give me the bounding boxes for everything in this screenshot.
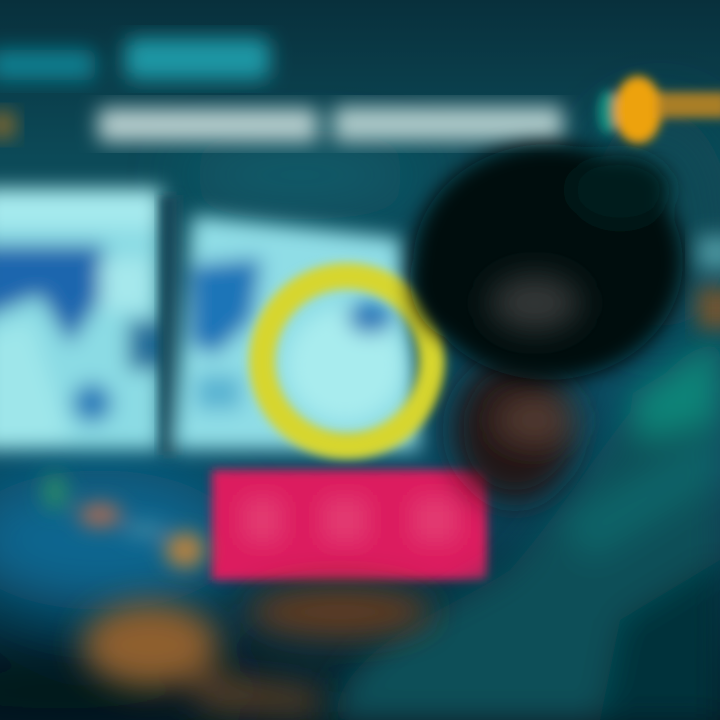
right edge details — [697, 235, 720, 329]
left orange mark — [0, 111, 16, 139]
panel: right monitor — [172, 215, 420, 450]
ring content — [287, 302, 403, 421]
highlight ring — [262, 276, 432, 446]
small chart streak — [43, 474, 205, 568]
heading: white subtitle — [98, 106, 563, 142]
person: shoulder — [330, 335, 720, 720]
hands — [82, 586, 432, 715]
person: cap — [410, 144, 683, 380]
monitor divider — [160, 195, 180, 455]
cap logo — [489, 275, 581, 331]
panel: left monitor — [0, 188, 162, 450]
icon: orange badge — [598, 76, 720, 144]
person: face — [453, 358, 577, 502]
pink cards — [212, 470, 487, 580]
heading: teal title — [0, 38, 270, 80]
